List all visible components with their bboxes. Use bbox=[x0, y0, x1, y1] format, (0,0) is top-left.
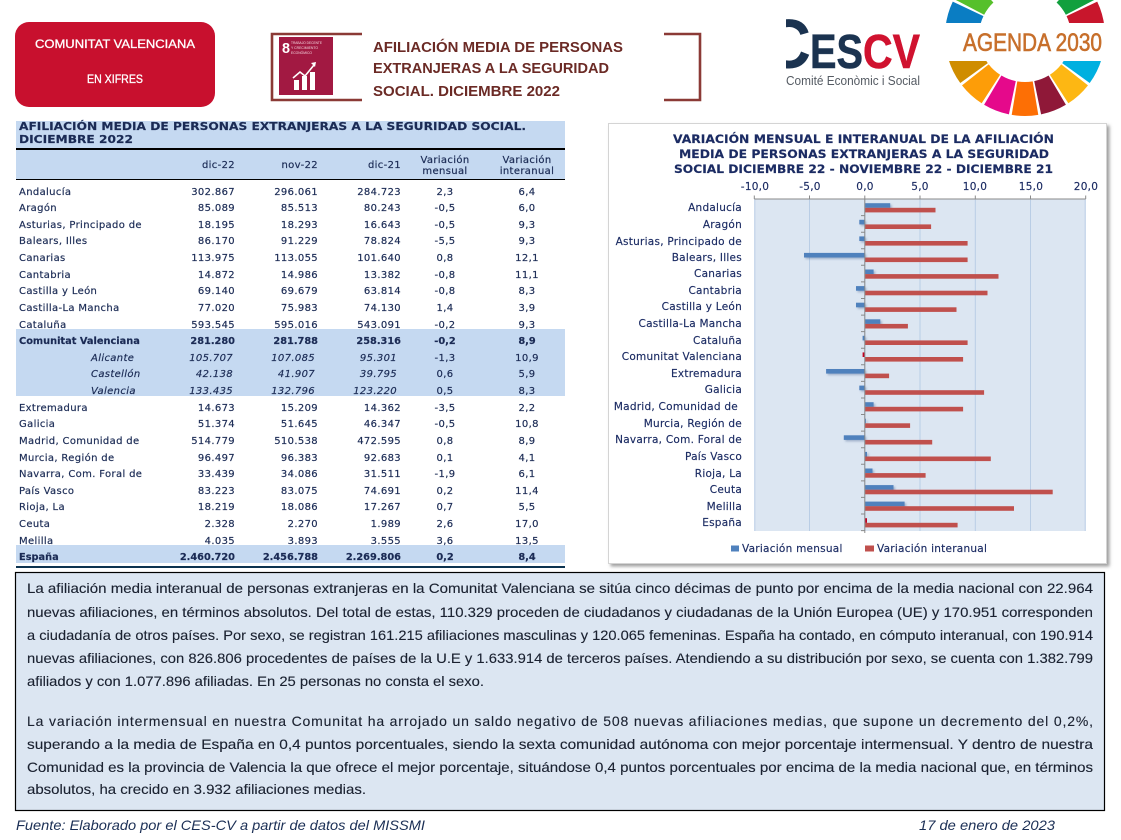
row: Rioja bbox=[19, 502, 535, 513]
row: País Vasco: 83.223 bbox=[198, 486, 235, 497]
chart title bbox=[673, 131, 1054, 176]
table title: AFILIACIÓN MEDIA DE PERSONAS EXTRANJERAS A LA SEGURIDAD SOCIAL. bbox=[19, 120, 526, 133]
table header bbox=[202, 154, 554, 177]
row: Rioja: 5,5 bbox=[519, 502, 535, 513]
row: Castellón bbox=[91, 368, 535, 380]
category labels: Cataluña bbox=[693, 335, 742, 347]
row: Castellón: 42.138 bbox=[196, 369, 233, 380]
row: Ceuta: 2.328 bbox=[205, 519, 235, 530]
row: Asturias: 18.195 bbox=[198, 220, 235, 231]
row: Madrid: 514.779 bbox=[191, 436, 235, 447]
bracket frame: title right bbox=[664, 34, 700, 100]
row: Navarra bbox=[19, 469, 535, 480]
row: Castilla y León: 69.140 bbox=[198, 286, 235, 297]
row: Castilla y León: 63.814 bbox=[364, 286, 401, 297]
row: Comunitat Valenciana: 281.280 bbox=[190, 336, 235, 347]
row: Madrid: Madrid, Comunidad de bbox=[19, 436, 140, 447]
row: Castilla y León: 69.679 bbox=[281, 286, 318, 297]
category labels: Balears, Illes bbox=[672, 252, 742, 264]
row: Navarra: 34.086 bbox=[281, 469, 318, 480]
row: Murcia: 96.497 bbox=[198, 453, 235, 464]
category labels: Melilla bbox=[707, 501, 742, 513]
paragraph 1: a ciudadanía de otros países. Por sexo, se registran 161.215 afiliaciones masculinas y 120.065 femeninas. España ha contado, en cómputo interanual, con 190.914 bbox=[27, 627, 1093, 643]
row: Alicante bbox=[90, 353, 539, 364]
row: Murcia: Murcia, Región de bbox=[19, 452, 114, 464]
logo: CES CV: Comité Econòmic i Social bbox=[786, 73, 920, 88]
row: Asturias bbox=[19, 220, 535, 231]
logo: CES CV: CV bbox=[863, 26, 920, 79]
row: Asturias: 9,3 bbox=[519, 220, 535, 231]
row: Murcia bbox=[19, 452, 535, 464]
row: Madrid: 472.595 bbox=[357, 436, 401, 447]
row: Rioja: 18.086 bbox=[281, 502, 318, 513]
row: Comunitat Valenciana: 8,9 bbox=[518, 336, 536, 347]
row: Alicante: -1,3 bbox=[435, 353, 455, 364]
row: Castilla-La Mancha: Castilla-La Mancha bbox=[19, 303, 120, 314]
row: Asturias: -0,5 bbox=[435, 220, 455, 231]
zero axis bbox=[861, 199, 865, 533]
row: Cantabria bbox=[19, 270, 539, 281]
row: Melilla: 13,5 bbox=[515, 536, 539, 547]
row: Galicia: 10,8 bbox=[515, 419, 539, 430]
row: Canarias: 113.055 bbox=[274, 253, 318, 264]
row: Castilla-La Mancha: 75.983 bbox=[281, 303, 318, 314]
row: Comunitat Valenciana: -0,2 bbox=[434, 336, 456, 347]
row: Cantabria: 14.986 bbox=[281, 270, 318, 281]
row: Ceuta: 2,6 bbox=[437, 519, 453, 530]
table header: dic-22 bbox=[202, 160, 235, 171]
row: Valencia: Valencia bbox=[91, 386, 136, 397]
row: Andalucía bbox=[19, 186, 535, 198]
row: Melilla: 4.035 bbox=[205, 536, 235, 547]
table header: Variación bbox=[502, 154, 552, 166]
row: Comunitat Valenciana: 258.316 bbox=[356, 336, 401, 347]
paragraph 1: La afiliación media interanual de personas extranjeras en la Comunitat Valenciana se sitúa cinco décimas de punto por encima de la media nacional con 22.964 bbox=[27, 580, 1093, 596]
icon: SDG 8 tile: Y CRECIMIENTO bbox=[291, 45, 318, 50]
title: SOCIAL. DICIEMBRE 2022 bbox=[373, 84, 560, 100]
axis labels: 20,0 bbox=[1074, 181, 1098, 193]
panel: commentary text bbox=[16, 572, 1104, 810]
table title bbox=[19, 120, 526, 146]
row: Canarias: 0,8 bbox=[437, 253, 453, 264]
row: Navarra: 6,1 bbox=[519, 469, 535, 480]
row: Canarias: 113.975 bbox=[191, 253, 235, 264]
row: Madrid: 510.538 bbox=[274, 436, 318, 447]
row: Castilla-La Mancha: 3,9 bbox=[519, 303, 535, 314]
chart title: VARIACIÓN MENSUAL E INTERANUAL DE LA AFILIACIÓN bbox=[673, 131, 1054, 146]
icon: SDG 8 tile: 8 bbox=[282, 40, 290, 57]
row: Asturias: 16.643 bbox=[364, 220, 401, 231]
table header: mensual bbox=[422, 166, 468, 177]
row: Balears: Balears, Illes bbox=[19, 236, 88, 247]
table header: dic-21 bbox=[368, 160, 401, 171]
row: Valencia: 133.435 bbox=[189, 386, 233, 397]
row: Galicia: 46.347 bbox=[364, 419, 401, 430]
row: Comunitat Valenciana: Comunitat Valenciana bbox=[19, 336, 140, 347]
axis labels: -5,0 bbox=[799, 181, 821, 193]
category labels: España bbox=[702, 517, 742, 529]
paragraph 1: nuevas afiliaciones, en términos absolutos. Del total de estas, 110.329 proceden de ciudadanos y ciudadanas de la Unión Europea (UE) y 170.951 corresponden bbox=[27, 604, 1093, 620]
row: Aragón: 6,0 bbox=[519, 203, 535, 214]
category labels bbox=[614, 202, 742, 529]
row: España: 2.460.720 bbox=[180, 552, 235, 563]
row: Balears: 78.824 bbox=[364, 236, 401, 247]
row: Castilla-La Mancha: 1,4 bbox=[437, 303, 453, 314]
row: Alicante: Alicante bbox=[90, 353, 134, 364]
category labels: País Vasco bbox=[685, 451, 742, 463]
axis labels: 0,0 bbox=[856, 181, 874, 193]
row: Valencia: 0,5 bbox=[437, 386, 453, 397]
row: Madrid: 8,9 bbox=[519, 436, 535, 447]
axis labels: -10,0 bbox=[741, 181, 769, 193]
row: Comunitat Valenciana bbox=[19, 336, 536, 347]
category labels: Navarra, Com. Foral de bbox=[615, 434, 742, 446]
icon: SDG 8 tile: ECONÓMICO bbox=[291, 50, 312, 55]
row: Castellón: 5,9 bbox=[519, 369, 535, 380]
badge: Comunitat Valenciana en xifres bbox=[15, 22, 215, 107]
row: Aragón: 80.243 bbox=[364, 203, 401, 214]
source note: Fuente: Elaborado por el CES-CV a partir de datos del MISSMI bbox=[16, 817, 425, 833]
row: Extremadura bbox=[19, 403, 535, 414]
category labels: Cantabria bbox=[688, 285, 742, 297]
row: Castilla-La Mancha bbox=[19, 303, 535, 314]
row: Castellón: 41.907 bbox=[278, 369, 315, 380]
paragraph 1 bbox=[27, 580, 1093, 689]
row: Ceuta: 17,0 bbox=[515, 519, 539, 530]
row: Cataluña: Cataluña bbox=[19, 320, 67, 331]
row: Melilla: 3,6 bbox=[437, 536, 453, 547]
row: Comunitat Valenciana: 281.788 bbox=[273, 336, 318, 347]
row: Extremadura: 14.362 bbox=[364, 403, 401, 414]
title: AFILIACIÓN MEDIA DE PERSONAS bbox=[373, 38, 623, 56]
row: Cataluña: 9,3 bbox=[519, 320, 535, 331]
date: 17 de enero de 2023 bbox=[919, 817, 1055, 833]
table header: Variación bbox=[420, 154, 470, 166]
row: Aragón: -0,5 bbox=[435, 203, 455, 214]
category labels: Galicia bbox=[705, 384, 742, 396]
row: Andalucía: 6,4 bbox=[519, 187, 535, 198]
paragraph 2: Comunidad es la provincia de Valencia la que ofrece el mejor porcentaje, situándose 0,4 puntos porcentuales por encima de la media nacional que, en términos bbox=[27, 759, 1093, 775]
row: Aragón: 85.513 bbox=[281, 203, 318, 214]
row: Alicante: 95.301 bbox=[360, 353, 397, 364]
row: Castellón: 39.795 bbox=[360, 369, 397, 380]
row: Extremadura: 14.673 bbox=[198, 403, 235, 414]
row: Balears bbox=[19, 236, 535, 247]
axis labels: 15,0 bbox=[1019, 181, 1043, 193]
row: Galicia: 51.374 bbox=[198, 419, 235, 430]
row: Melilla: 3.555 bbox=[371, 536, 401, 547]
category labels: Rioja, La bbox=[695, 468, 742, 480]
bars: variación interanual bbox=[865, 208, 1053, 527]
row: Murcia: 92.683 bbox=[364, 453, 401, 464]
row: Valencia: 132.796 bbox=[271, 386, 315, 397]
row: Alicante: 10,9 bbox=[515, 353, 539, 364]
row: Galicia: -0,5 bbox=[435, 419, 455, 430]
row: Castilla y León: -0,8 bbox=[435, 286, 455, 297]
category labels: Asturias, Principado de bbox=[616, 236, 742, 248]
category labels: Canarias bbox=[694, 268, 742, 280]
logo: CES CV bbox=[786, 19, 920, 85]
row: Balears: 86.170 bbox=[198, 236, 235, 247]
logo: CES CV: ES bbox=[810, 26, 863, 79]
category labels: Aragón bbox=[703, 219, 742, 231]
row: Castilla y León: 8,3 bbox=[519, 286, 535, 297]
icon: SDG 8 tile bbox=[279, 37, 333, 95]
row: Aragón: 85.089 bbox=[198, 203, 235, 214]
row: Balears: 91.229 bbox=[281, 236, 318, 247]
row: Extremadura: -3,5 bbox=[435, 403, 455, 414]
category labels: Extremadura bbox=[671, 368, 742, 380]
row: Alicante: 105.707 bbox=[189, 353, 233, 364]
row: Cantabria: 13.382 bbox=[364, 270, 401, 281]
row: Castilla y León bbox=[19, 285, 535, 297]
legend bbox=[731, 543, 987, 555]
axis labels bbox=[741, 181, 1098, 193]
row: España: España bbox=[19, 552, 59, 563]
logo: CES CV: C bbox=[764, 5, 811, 83]
paragraph 2: La variación intermensual en nuestra Comunitat ha arrojado un saldo negativo de 508 nuevas afiliaciones medias, que supone un decremento del 0,2%, bbox=[27, 713, 1093, 729]
panel: bar chart bbox=[608, 124, 1106, 564]
row: Aragón: Aragón bbox=[19, 202, 57, 214]
row: Castellón: 0,6 bbox=[437, 369, 453, 380]
row: Cantabria: 11,1 bbox=[515, 270, 539, 281]
row: País Vasco bbox=[19, 485, 539, 497]
table header: nov-22 bbox=[281, 160, 318, 171]
row: Valencia: 8,3 bbox=[519, 386, 535, 397]
row: Cataluña: 593.545 bbox=[191, 320, 235, 331]
row: Andalucía: 302.867 bbox=[191, 187, 235, 198]
row: Cantabria: 14.872 bbox=[198, 270, 235, 281]
category labels: Murcia, Región de bbox=[644, 418, 742, 430]
row: Castilla y León: Castilla y León bbox=[19, 285, 97, 297]
row: Cataluña bbox=[19, 320, 535, 331]
row: Ceuta bbox=[19, 519, 539, 530]
row: Castellón: Castellón bbox=[91, 368, 141, 380]
row: Galicia: 51.645 bbox=[281, 419, 318, 430]
row: Asturias: 18.293 bbox=[281, 220, 318, 231]
row: Andalucía: 2,3 bbox=[437, 187, 453, 198]
row: Navarra: 31.511 bbox=[364, 469, 401, 480]
row: Melilla: 3.893 bbox=[288, 536, 318, 547]
row: Andalucía: Andalucía bbox=[19, 186, 71, 198]
title: EXTRANJERAS A LA SEGURIDAD bbox=[373, 61, 609, 77]
chart title: MEDIA DE PERSONAS EXTRANJERAS A LA SEGURIDAD bbox=[679, 147, 1049, 161]
row: Madrid: 0,8 bbox=[437, 436, 453, 447]
panel: data table bbox=[16, 120, 565, 568]
row: Madrid bbox=[19, 436, 535, 447]
axis labels: 10,0 bbox=[963, 181, 987, 193]
paragraph 2: absolutos, ha crecido en 3.932 afiliaciones medias. bbox=[27, 781, 366, 797]
row: Asturias: Asturias, Principado de bbox=[19, 220, 142, 231]
row: Murcia: 0,1 bbox=[437, 453, 453, 464]
row: Andalucía: 296.061 bbox=[274, 187, 318, 198]
row: España: 8,4 bbox=[518, 552, 536, 563]
paragraph 1: nuevas afiliaciones, con 826.806 procedentes de países de la U.E y 1.633.914 de terceros países. Atendiendo a su distribución por sexo, se cuenta con 1.382.799 bbox=[27, 650, 1093, 666]
row: Balears: 9,3 bbox=[519, 236, 535, 247]
table title: DICIEMBRE 2022 bbox=[19, 134, 133, 146]
row: Extremadura: 15.209 bbox=[281, 403, 318, 414]
row: Canarias: Canarias bbox=[19, 253, 66, 264]
row: Canarias: 12,1 bbox=[515, 253, 539, 264]
row: Navarra: 33.439 bbox=[198, 469, 235, 480]
row: Galicia bbox=[19, 419, 539, 430]
highlighted small bars bbox=[863, 352, 867, 523]
row: Navarra: -1,9 bbox=[435, 469, 455, 480]
category labels: Comunitat Valenciana bbox=[622, 351, 742, 363]
row: País Vasco: 0,2 bbox=[437, 486, 453, 497]
plot area bbox=[754, 199, 1086, 531]
axis labels: 5,0 bbox=[911, 181, 929, 193]
badge: Comunitat Valenciana en xifres: COMUNITAT VALENCIANA bbox=[35, 37, 195, 51]
row: España bbox=[19, 552, 536, 563]
row: España: 2.456.788 bbox=[263, 552, 318, 563]
row: Cantabria: -0,8 bbox=[435, 270, 455, 281]
row: Melilla bbox=[19, 536, 539, 547]
row: Ceuta: 1.989 bbox=[371, 519, 401, 530]
category labels: Madrid, Comunidad de bbox=[614, 401, 738, 413]
row: Cataluña: -0,2 bbox=[435, 320, 455, 331]
row: Galicia: Galicia bbox=[19, 419, 55, 430]
row: Andalucía: 284.723 bbox=[357, 187, 401, 198]
badge: Comunitat Valenciana en xifres: EN XIFRES bbox=[87, 72, 143, 86]
row: Castilla-La Mancha: 74.130 bbox=[364, 303, 401, 314]
row: Canarias bbox=[19, 253, 539, 264]
row: Alicante: 107.085 bbox=[271, 353, 315, 364]
row: Rioja: 17.267 bbox=[364, 502, 401, 513]
table header: interanual bbox=[500, 166, 554, 177]
row: Valencia bbox=[91, 386, 535, 397]
row: Cataluña: 595.016 bbox=[274, 320, 318, 331]
row: Rioja: 18.219 bbox=[198, 502, 235, 513]
row: Extremadura: 2,2 bbox=[519, 403, 535, 414]
bars: variación mensual bbox=[804, 203, 905, 506]
row: Murcia: 4,1 bbox=[519, 453, 535, 464]
category labels: Castilla y León bbox=[662, 301, 742, 313]
row: Cantabria: Cantabria bbox=[19, 270, 71, 281]
legend: Variación mensual bbox=[742, 543, 843, 555]
row: Balears: -5,5 bbox=[435, 236, 455, 247]
paragraph 2: superando a la media de España en 0,4 puntos porcentuales, siendo la sexta comunidad autónoma con mejor porcentaje intermensual. Y dentro de nuestra bbox=[27, 736, 1093, 752]
row: Cataluña: 543.091 bbox=[357, 320, 401, 331]
icon: SDG 8 tile: TRABAJO DECENTE bbox=[291, 40, 322, 45]
category labels: Ceuta bbox=[710, 484, 742, 496]
chart title: SOCIAL DICIEMBRE 22 - NOVIEMBRE 22 - DICIEMBRE 21 bbox=[674, 162, 1053, 176]
row: Rioja: 0,7 bbox=[437, 502, 453, 513]
row: Navarra: Navarra, Com. Foral de bbox=[19, 469, 142, 480]
row: Aragón bbox=[19, 202, 535, 214]
row: Castilla-La Mancha: 77.020 bbox=[198, 303, 235, 314]
row: España: 2.269.806 bbox=[346, 552, 401, 563]
row: Valencia: 123.220 bbox=[353, 386, 397, 397]
row: Canarias: 101.640 bbox=[357, 253, 401, 264]
title bbox=[373, 38, 623, 100]
row: Murcia: 96.383 bbox=[281, 453, 318, 464]
category labels: Castilla-La Mancha bbox=[639, 318, 742, 330]
bracket frame: title left bbox=[272, 34, 362, 100]
legend: Variación interanual bbox=[877, 543, 987, 555]
row: Ceuta: 2.270 bbox=[288, 519, 318, 530]
row: España: 0,2 bbox=[436, 552, 454, 563]
row: País Vasco: 11,4 bbox=[515, 486, 539, 497]
row: Extremadura: Extremadura bbox=[19, 403, 88, 414]
paragraph 2 bbox=[27, 713, 1093, 797]
row: Melilla: Melilla bbox=[19, 536, 53, 547]
paragraph 1: afiliados y con 1.077.896 afiliadas. En 25 personas no consta el sexo. bbox=[27, 673, 484, 689]
category labels: Andalucía bbox=[688, 202, 742, 214]
row: País Vasco: País Vasco bbox=[19, 485, 74, 497]
row: Ceuta: Ceuta bbox=[19, 519, 50, 530]
row: Rioja: Rioja, La bbox=[19, 502, 65, 513]
row: País Vasco: 83.075 bbox=[281, 486, 318, 497]
row: País Vasco: 74.691 bbox=[364, 486, 401, 497]
logo: Agenda 2030 wheel bbox=[940, 0, 1115, 116]
